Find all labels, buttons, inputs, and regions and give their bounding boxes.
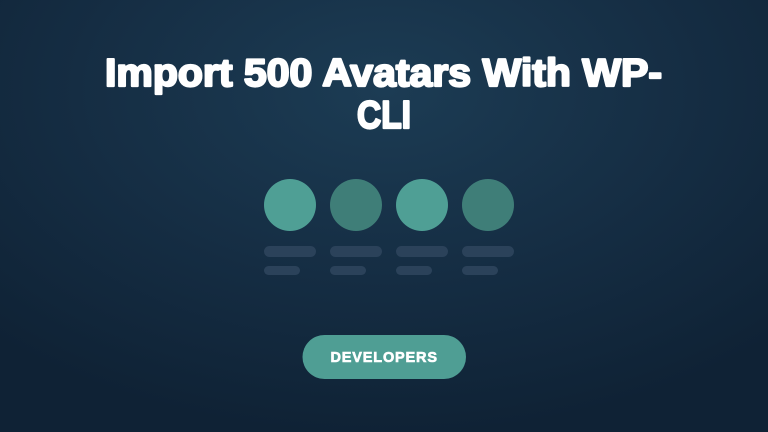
category button: DEVELOPERS [330,350,437,366]
avatar card 1 [264,179,316,275]
avatar card 4 [462,179,514,275]
avatar card 2 [330,179,382,275]
title: CLI [357,94,411,137]
title: Import 500 Avatars With WP- [105,52,662,95]
title [105,52,662,137]
avatar card 3 [396,179,448,275]
category button [302,335,466,379]
avatar list illustration [264,179,514,275]
